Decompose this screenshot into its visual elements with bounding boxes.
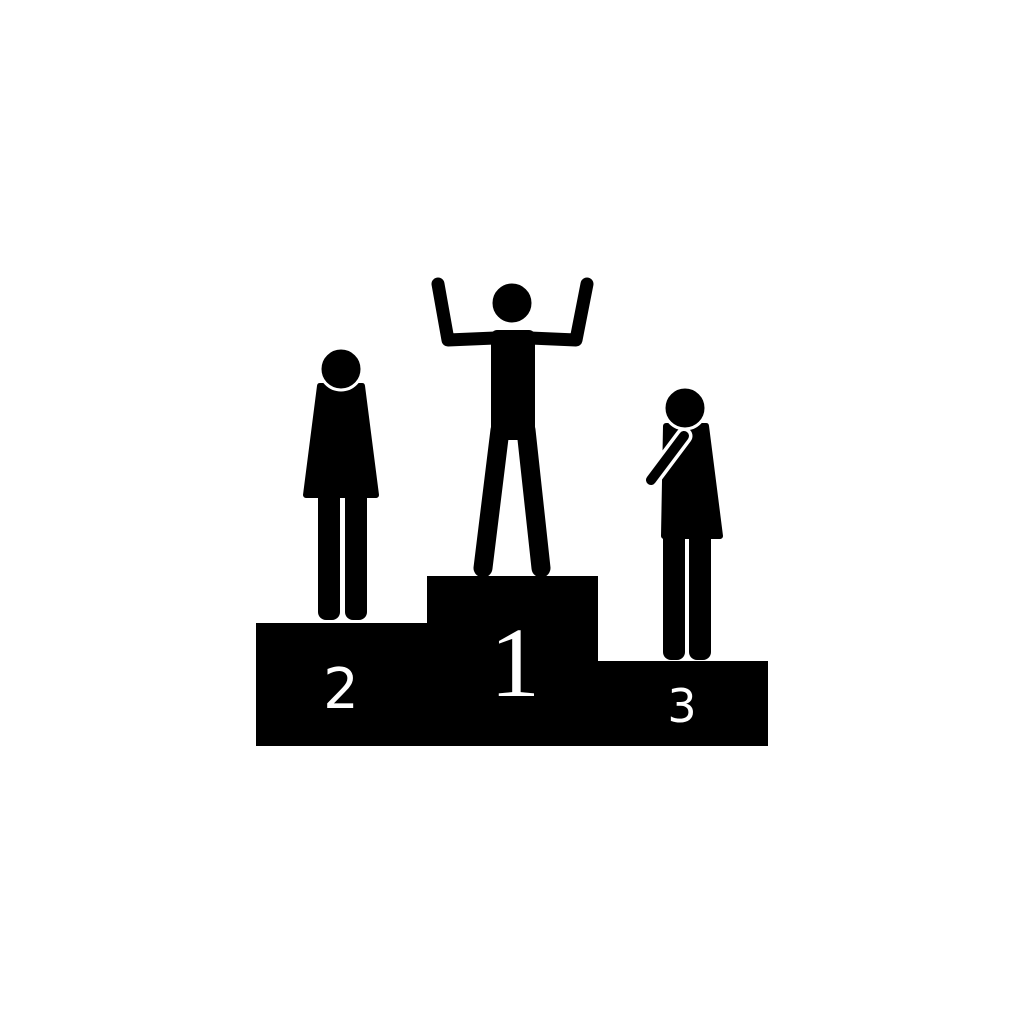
- podium: [256, 576, 768, 746]
- podium numbers: 3: [667, 679, 697, 733]
- podium numbers: 2: [323, 657, 359, 722]
- podium numbers: 1: [490, 607, 540, 718]
- figure: third place: [651, 387, 720, 660]
- figure: second place: [306, 348, 376, 620]
- podium numbers: [323, 607, 697, 733]
- figure: winner (1st place): [438, 282, 587, 568]
